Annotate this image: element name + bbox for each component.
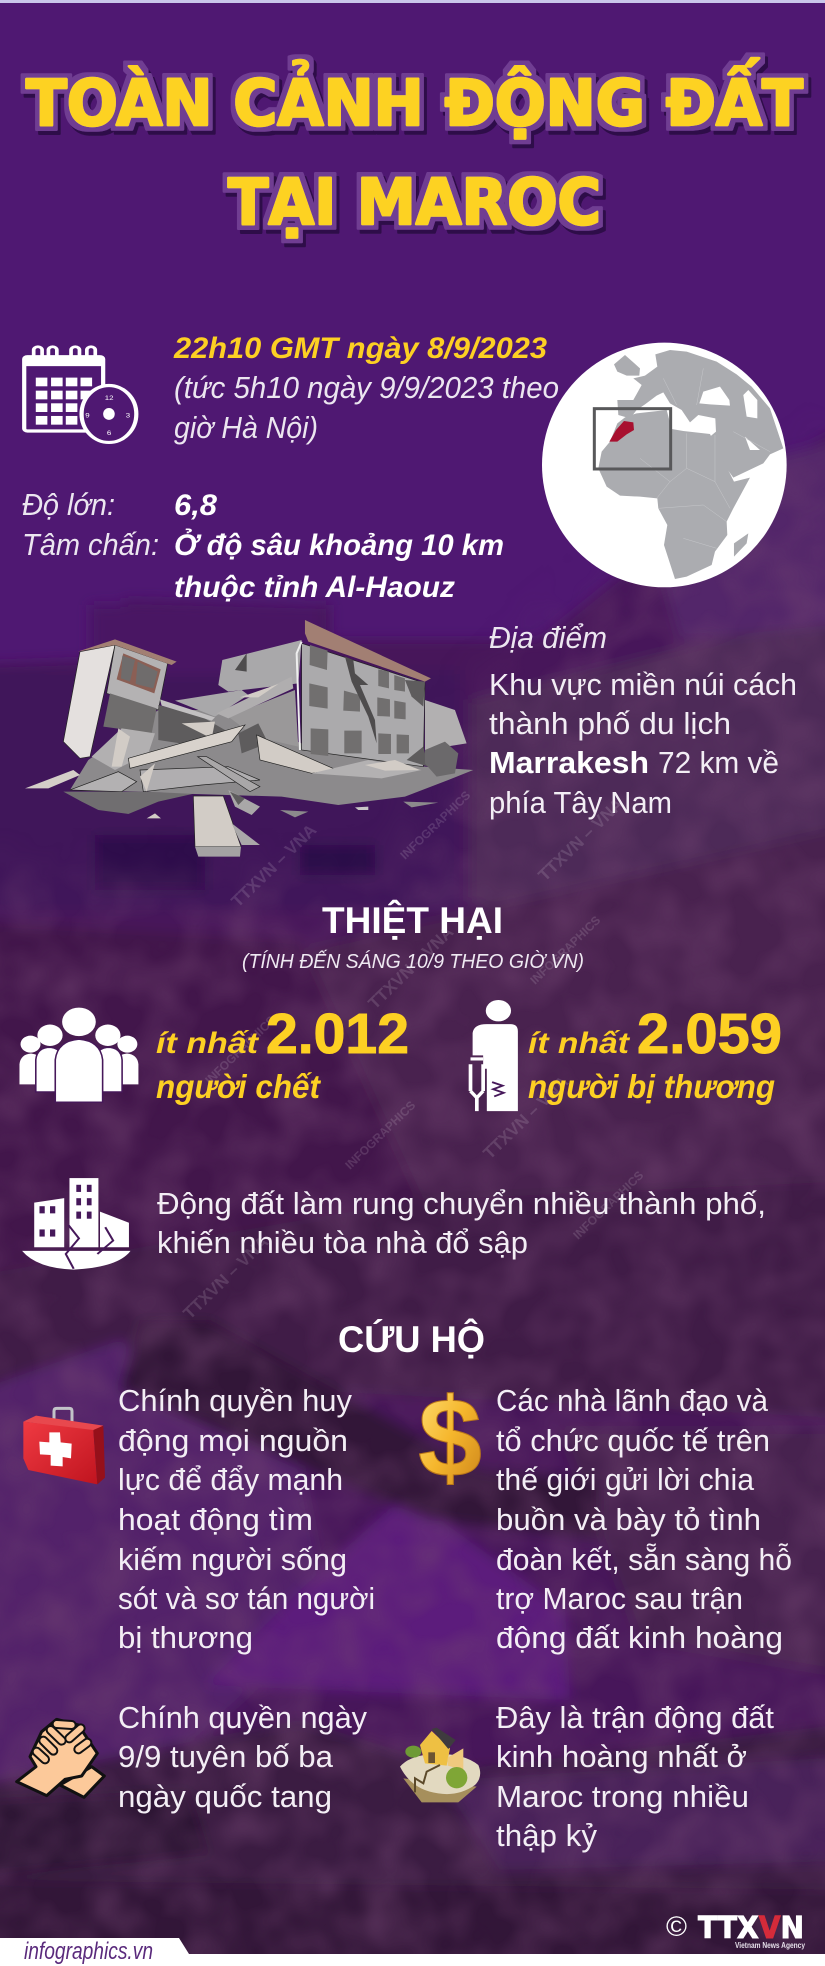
- text: rescue 1: hoạt động tìm: [118, 1502, 313, 1537]
- text: rescue 1: sót và sơ tán người: [118, 1581, 375, 1616]
- location text: [489, 620, 797, 820]
- location text: 72 km về: [658, 745, 779, 780]
- text: rescue 1: bị thương: [118, 1620, 253, 1655]
- heading: rescue: CỨU HỘ: [338, 1318, 485, 1360]
- icon: clasped hands: [17, 1719, 104, 1797]
- watermarks: INFOGRAPHICS: [527, 913, 603, 987]
- text: rescue 2: thế giới gửi lời chia: [496, 1462, 755, 1497]
- watermarks: TTXVN – VNA: [180, 1232, 272, 1323]
- text: buildings collapsed: [157, 1186, 766, 1260]
- right building: [302, 643, 425, 767]
- title: TOÀN CẢNH ĐỘNG ĐẤT: [26, 59, 803, 140]
- fallen slab: [193, 796, 241, 847]
- icon: calendar and clock: 12: [105, 396, 114, 402]
- text: rescue 1: [118, 1383, 375, 1655]
- watermarks: [180, 788, 646, 1323]
- title: [26, 59, 803, 239]
- ground: [63, 792, 195, 814]
- icon: house on cracked ground: [400, 1728, 480, 1802]
- text: rescue 1: Chính quyền huy: [118, 1383, 352, 1418]
- injured stat: 2.059: [637, 1002, 782, 1066]
- text: rescue 2: trợ Maroc sau trận: [496, 1581, 743, 1616]
- icon: calendar and clock: [24, 347, 136, 442]
- watermarks: TTXVN – VNA: [365, 922, 457, 1013]
- icon: calendar and clock: 3: [126, 413, 130, 419]
- central rubble: [158, 705, 225, 747]
- text: rescue 1: lực để đẩy mạnh: [118, 1462, 343, 1497]
- watermarks: TTXVN – VNA: [228, 820, 320, 911]
- magnitude and epicentre text: Ở độ sâu khoảng 10 km: [174, 527, 504, 562]
- text: rescue 4: Đây là trận động đất: [496, 1700, 774, 1735]
- deaths stat: [156, 1002, 409, 1105]
- magnitude and epicentre text: Tâm chấn:: [22, 527, 159, 562]
- icon: dollar sign: $: [418, 1375, 482, 1500]
- background: top light strip: [0, 0, 825, 3]
- injured stat: người bị thương: [528, 1068, 775, 1105]
- title: TẠI MAROC: [228, 166, 601, 239]
- date text: (tức 5h10 ngày 9/9/2023 theo: [174, 370, 559, 405]
- logo: TTXVN: Vietnam News Agency: [735, 1941, 805, 1950]
- logo: TTXVN: ©: [666, 1911, 687, 1942]
- text: rescue 3: [118, 1700, 367, 1814]
- Morocco: [609, 421, 634, 442]
- magnitude and epicentre text: Độ lớn:: [22, 487, 115, 522]
- text: buildings collapsed: Động đất làm rung chuyển nhiều thành phố,: [157, 1186, 766, 1221]
- icon: injured person on crutch: [471, 1000, 518, 1111]
- icon: cracked buildings: [22, 1178, 131, 1270]
- location text: Marrakesh: [489, 745, 649, 780]
- date text: giờ Hà Nội): [174, 410, 318, 445]
- magnitude and epicentre text: [22, 487, 504, 604]
- heading: damage: [242, 899, 584, 973]
- text: rescue 3: ngày quốc tang: [118, 1779, 332, 1814]
- date text: 22h10 GMT ngày 8/9/2023: [173, 332, 547, 365]
- watermarks: TTXVN – VNA: [535, 794, 627, 885]
- icon: calendar and clock: 9: [85, 413, 90, 419]
- text: rescue 4: [496, 1700, 774, 1853]
- location text: thành phố du lịch: [489, 706, 731, 741]
- icon: calendar and clock: 6: [107, 431, 111, 437]
- background: ruined city photo: [0, 400, 825, 1966]
- logo: TTXVN: TTXVN: [698, 1911, 804, 1946]
- watermarks: INFOGRAPHICS: [570, 1168, 646, 1242]
- watermarks: TTXVN – VNA: [480, 1072, 572, 1163]
- footer: white bar and site name: infographics.vn: [24, 1938, 153, 1965]
- globe map: [542, 343, 787, 587]
- text: rescue 2: đoàn kết, sẵn sàng hỗ: [496, 1542, 792, 1577]
- text: buildings collapsed: khiến nhiều tòa nhà đổ sập: [157, 1225, 528, 1260]
- injured stat: [528, 1002, 782, 1105]
- footer: white bar and site name: [0, 1938, 825, 1966]
- watermarks: INFOGRAPHICS: [342, 1098, 418, 1172]
- logo: TTXVN: [666, 1911, 805, 1950]
- location text: Địa điểm: [489, 620, 607, 655]
- text: rescue 3: 9/9 tuyên bố ba: [118, 1739, 334, 1774]
- location text: Khu vực miền núi cách: [489, 667, 797, 702]
- date text: [173, 332, 559, 445]
- watermarks: INFOGRAPHICS: [202, 1013, 278, 1087]
- text: rescue 2: buồn và bày tỏ tình: [496, 1502, 761, 1537]
- left tower: [63, 645, 115, 758]
- illustration: collapsed buildings: [25, 620, 473, 857]
- text: rescue 4: Maroc trong nhiều: [496, 1779, 749, 1814]
- text: rescue 1: động mọi nguồn: [118, 1423, 348, 1458]
- heading: damage: THIỆT HẠI: [322, 899, 503, 941]
- text: rescue 3: Chính quyền ngày: [118, 1700, 367, 1735]
- text: rescue 4: kinh hoàng nhất ở: [496, 1739, 747, 1774]
- magnitude and epicentre text: thuộc tỉnh Al-Haouz: [174, 571, 455, 604]
- location text: phía Tây Nam: [489, 785, 672, 820]
- rear right wing: [218, 640, 302, 692]
- icon: group of people: [19, 1008, 138, 1102]
- inset box: [594, 409, 671, 469]
- text: rescue 2: Các nhà lãnh đạo và: [496, 1383, 769, 1418]
- text: rescue 2: động đất kinh hoàng: [496, 1620, 783, 1655]
- deaths stat: 2.012: [266, 1002, 409, 1066]
- text: rescue 2: [496, 1383, 792, 1655]
- deaths stat: ít nhất: [156, 1027, 260, 1060]
- icon: first aid kit: [23, 1408, 105, 1484]
- magnitude and epicentre text: 6,8: [174, 489, 217, 522]
- watermarks: INFOGRAPHICS: [397, 788, 473, 862]
- heading: damage: (TÍNH ĐẾN SÁNG 10/9 THEO GIỜ VN): [242, 949, 584, 973]
- background: rock texture: [0, 400, 825, 1966]
- injured stat: ít nhất: [528, 1027, 631, 1060]
- deaths stat: người chết: [156, 1068, 322, 1105]
- text: rescue 1: kiếm người sống: [118, 1542, 347, 1577]
- text: rescue 2: tổ chức quốc tế trên: [496, 1423, 770, 1458]
- text: rescue 4: thập kỷ: [496, 1818, 597, 1853]
